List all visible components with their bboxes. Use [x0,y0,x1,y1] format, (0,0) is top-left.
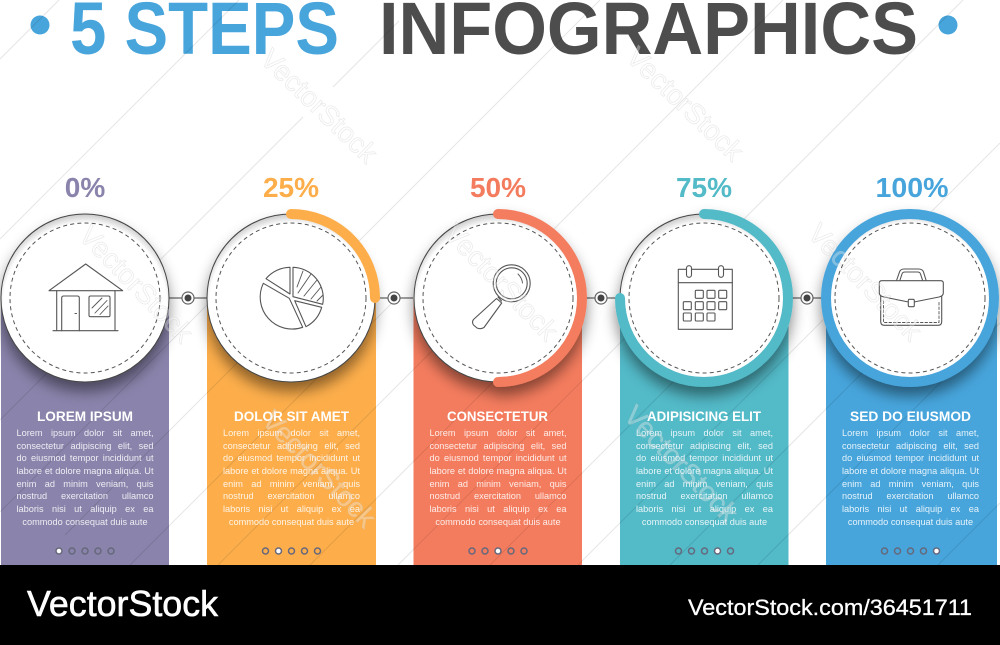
watermarks [73,41,929,534]
heading 5: SED DO EIUSMOD [850,409,971,424]
panel: step 1 background [1,298,169,565]
text block 2: laboris nisi ut aliquip ex ea [223,504,360,514]
text block 2: enim ad minim veniam, quis [223,479,360,489]
text block 3: do eiusmod tempor incididunt ut [430,453,566,463]
watermarks: VectorStock [255,43,384,170]
text block 5: laboris nisi ut aliquip ex ea [842,504,979,514]
watermarks: VectorStock [256,404,383,534]
text block 3: commodo consequat duis aute [435,517,561,527]
text block 3: Lorem ipsum dolor sit amet, [430,428,566,438]
watermarks: VectorStock [802,217,929,347]
text block 4: do eiusmod tempor incididunt ut [636,453,773,463]
heading 2: DOLOR SIT AMET [234,409,350,424]
text block 3: labore et dolore magna aliqua. Ut [430,466,566,476]
text block 5: Lorem ipsum dolor sit amet, [842,428,979,438]
icon: house [49,264,123,331]
footer bar: VectorStock.com/36451711 [688,595,972,620]
icon: briefcase [879,269,943,325]
text block 5: enim ad minim veniam, quis [842,479,979,489]
pager 3 [469,548,527,554]
step 3 circle with 50% ring [414,214,582,382]
panel: step 4 background [620,298,788,565]
percent 100: 100% [876,172,949,203]
text block 2: do eiusmod tempor incididunt ut [223,453,360,463]
connector 4 [788,292,826,304]
panel: step 2 background [207,298,376,565]
watermarks: VectorStock [438,217,565,347]
text block 2: commodo consequat duis aute [229,517,354,527]
connector 1 [169,292,207,304]
text block 2: consectetur adipiscing elit, sed [223,440,360,450]
connector 2 [376,292,413,304]
heading 4: ADIPISICING ELIT [647,409,762,424]
footer bar [0,565,1000,645]
watermarks: VectorStock [618,399,745,529]
text block 4: Lorem ipsum dolor sit amet, [636,428,773,438]
icon: calendar [678,266,732,329]
percent 50: 50% [470,172,526,203]
text block 4: nostrud exercitation ullamco [636,491,773,501]
text block 3 [430,428,566,527]
text block 2: labore et dolore magna aliqua. Ut [223,466,360,476]
heading 3: CONSECTETUR [447,409,548,424]
text block 5: commodo consequat duis aute [848,517,973,527]
text block 2: nostrud exercitation ullamco [223,491,360,501]
footer bar: VectorStock [27,583,219,624]
pager 2 [262,548,320,554]
panel: step 5 background [826,298,997,565]
step 5 circle with 100% ring [826,214,994,382]
text block 3: enim ad minim veniam, quis [430,479,566,489]
step 4 circle with 75% ring [620,214,788,382]
text block 2: Lorem ipsum dolor sit amet, [223,428,360,438]
heading 1: LOREM IPSUM [37,409,133,424]
text block 1: labore et dolore magna aliqua. Ut [16,466,154,476]
text block 2 [223,428,360,527]
text block 4: commodo consequat duis aute [642,517,767,527]
connector 3 [582,292,620,304]
step 2 circle with 25% ring [207,214,375,382]
text block 3: laboris nisi ut aliquip ex ea [430,504,566,514]
title [30,0,958,70]
text block 1: consectetur adipiscing elit, sed [16,440,154,450]
pager 4 [676,548,734,554]
text block 4: laboris nisi ut aliquip ex ea [636,504,773,514]
text block 3: nostrud exercitation ullamco [430,491,566,501]
text block 1: commodo consequat duis aute [22,517,148,527]
text block 4: labore et dolore magna aliqua. Ut [636,466,773,476]
text block 4: consectetur adipiscing elit, sed [636,440,773,450]
pager 5 [882,548,940,554]
percent 75: 75% [676,172,732,203]
text block 5: consectetur adipiscing elit, sed [842,440,979,450]
text block 5: do eiusmod tempor incididunt ut [842,453,979,463]
text block 1: laboris nisi ut aliquip ex ea [16,504,154,514]
percent 0: 0% [65,172,105,203]
text block 1: Lorem ipsum dolor sit amet, [16,428,154,438]
text block 4 [636,428,773,527]
text block 5: nostrud exercitation ullamco [842,491,979,501]
text block 1: nostrud exercitation ullamco [16,491,154,501]
text block 1 [16,428,154,527]
text block 4: enim ad minim veniam, quis [636,479,773,489]
watermarks: VectorStock [621,41,750,168]
text block 1: enim ad minim veniam, quis [16,479,154,489]
watermarks: VectorStock [73,219,200,349]
pager 1 [56,548,114,554]
step 1 circle [1,214,169,382]
text block 3: consectetur adipiscing elit, sed [430,440,566,450]
icon: pie chart [260,267,323,329]
text block 5: labore et dolore magna aliqua. Ut [842,466,979,476]
text block 5 [842,428,979,527]
percent 25: 25% [263,172,319,203]
panel: step 3 background [414,298,582,565]
text block 1: do eiusmod tempor incididunt ut [16,453,154,463]
icon: magnifier [472,265,530,329]
